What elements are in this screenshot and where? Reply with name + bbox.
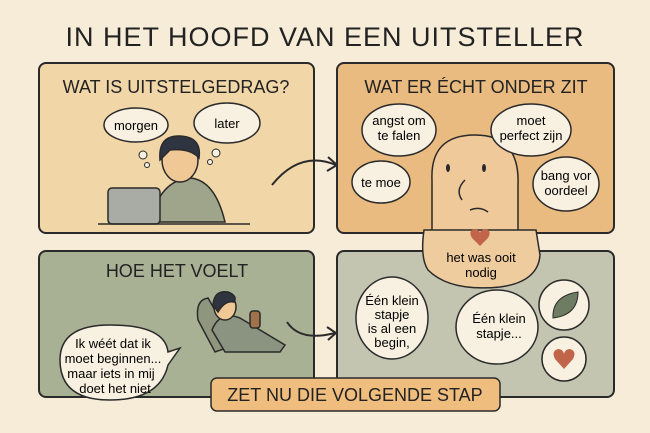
bubble: een klein stapje is al een begin: begin, bbox=[374, 335, 410, 350]
title: IN HET HOOFD VAN EEN UITSTELLER bbox=[65, 22, 585, 52]
arrow: bottom bbox=[287, 322, 335, 336]
bubble: een klein stapje is al een begin: Één klein bbox=[365, 293, 419, 308]
cloud: later bbox=[194, 103, 260, 143]
callout: het was ooit nodig: het was ooit bbox=[446, 250, 516, 265]
cloud: angst om te falen: angst om bbox=[372, 113, 426, 128]
cloud: moet perfect zijn: moet bbox=[517, 113, 546, 128]
icon: leaf bbox=[539, 280, 589, 330]
cloud: te moe bbox=[352, 161, 410, 203]
bubble: een klein stapje: Één klein bbox=[472, 311, 526, 326]
panel: kleine stapjes bbox=[337, 251, 614, 397]
panel: wat er echt onder zit bbox=[337, 63, 614, 233]
button: zet nu die volgende stap: ZET NU DIE VOLGENDE STAP bbox=[227, 385, 483, 405]
cloud: moet perfect zijn: perfect zijn bbox=[500, 128, 562, 143]
speech bubble: ik weet: moet beginnen... bbox=[65, 351, 161, 366]
panel: hoe het voelt bbox=[39, 251, 314, 397]
speech bubble: ik weet: Ik wéét dat ik bbox=[75, 336, 151, 351]
cloud: bang vor oordeel: oordeel bbox=[544, 183, 588, 198]
bubble: een klein stapje: stapje... bbox=[476, 326, 522, 341]
bubble: een klein stapje is al een begin: is al een bbox=[368, 321, 416, 336]
arrow: top bbox=[272, 160, 336, 185]
speech bubble: ik weet: maar iets in mij bbox=[67, 366, 155, 381]
cloud: te moe: te moe bbox=[361, 175, 401, 190]
icon: heart bbox=[542, 337, 586, 381]
cloud: morgen bbox=[104, 108, 168, 142]
icon: face bbox=[432, 135, 518, 233]
bubble: een klein stapje is al een begin bbox=[356, 277, 428, 359]
button: zet nu die volgende stap bbox=[211, 378, 500, 411]
cloud: angst om te falen bbox=[362, 104, 436, 156]
bubble: een klein stapje bbox=[456, 290, 538, 364]
heading: wat is uitstelgedrag: WAT IS UITSTELGEDRAG? bbox=[63, 77, 289, 97]
heading: HOE HET VOELT bbox=[106, 261, 248, 281]
cloud: bang vor oordeel: bang vor bbox=[541, 168, 592, 183]
callout: het was ooit nodig: nodig bbox=[465, 265, 497, 280]
cloud: bang vor oordeel bbox=[533, 157, 599, 211]
speech bubble: ik weet: doet het niet bbox=[79, 381, 151, 396]
callout: het was ooit nodig bbox=[423, 229, 540, 288]
heading: WAT ER ÉCHT ONDER ZIT bbox=[364, 77, 588, 97]
panel: wat is uitstelgedrag bbox=[39, 63, 314, 233]
cloud: angst om te falen: te falen bbox=[378, 128, 420, 143]
cloud: morgen: morgen bbox=[114, 118, 158, 133]
bubble: een klein stapje is al een begin: stapje bbox=[375, 307, 409, 322]
icon: person on couch with phone bbox=[197, 292, 285, 352]
icon: person at laptop bbox=[98, 136, 250, 224]
cloud: later: later bbox=[214, 116, 240, 131]
cloud: moet perfect zijn bbox=[491, 104, 571, 156]
speech bubble: ik weet bbox=[60, 325, 180, 400]
